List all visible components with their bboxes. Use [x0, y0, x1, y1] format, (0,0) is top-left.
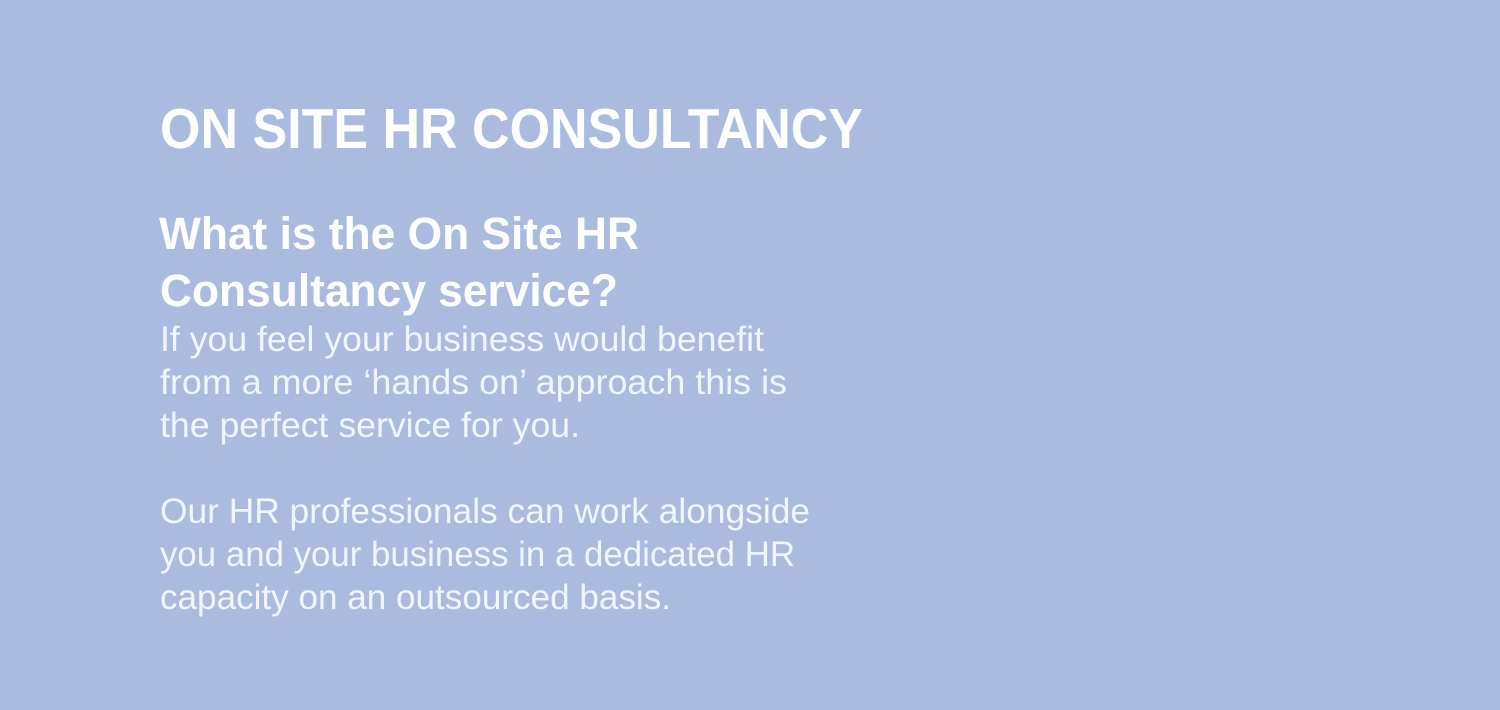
text block: first paragraph: the perfect service for you.: [160, 406, 580, 445]
subheading: service question: [159, 208, 639, 316]
text block: second paragraph: capacity on an outsourced basis.: [160, 578, 671, 617]
text block: second paragraph: you and your business in a dedicated HR: [160, 535, 795, 574]
subheading: service question: What is the On Site HR: [159, 208, 639, 259]
text block: first paragraph: If you feel your business would benefit: [160, 320, 764, 359]
text block: first paragraph: [160, 320, 787, 445]
text block: second paragraph: Our HR professionals can work alongside: [160, 492, 810, 531]
text block: second paragraph: [160, 492, 810, 617]
text block: first paragraph: from a more ‘hands on’ approach this is: [160, 363, 787, 402]
subheading: service question: Consultancy service?: [160, 265, 618, 316]
title: ON SITE HR CONSULTANCY: [160, 97, 863, 161]
